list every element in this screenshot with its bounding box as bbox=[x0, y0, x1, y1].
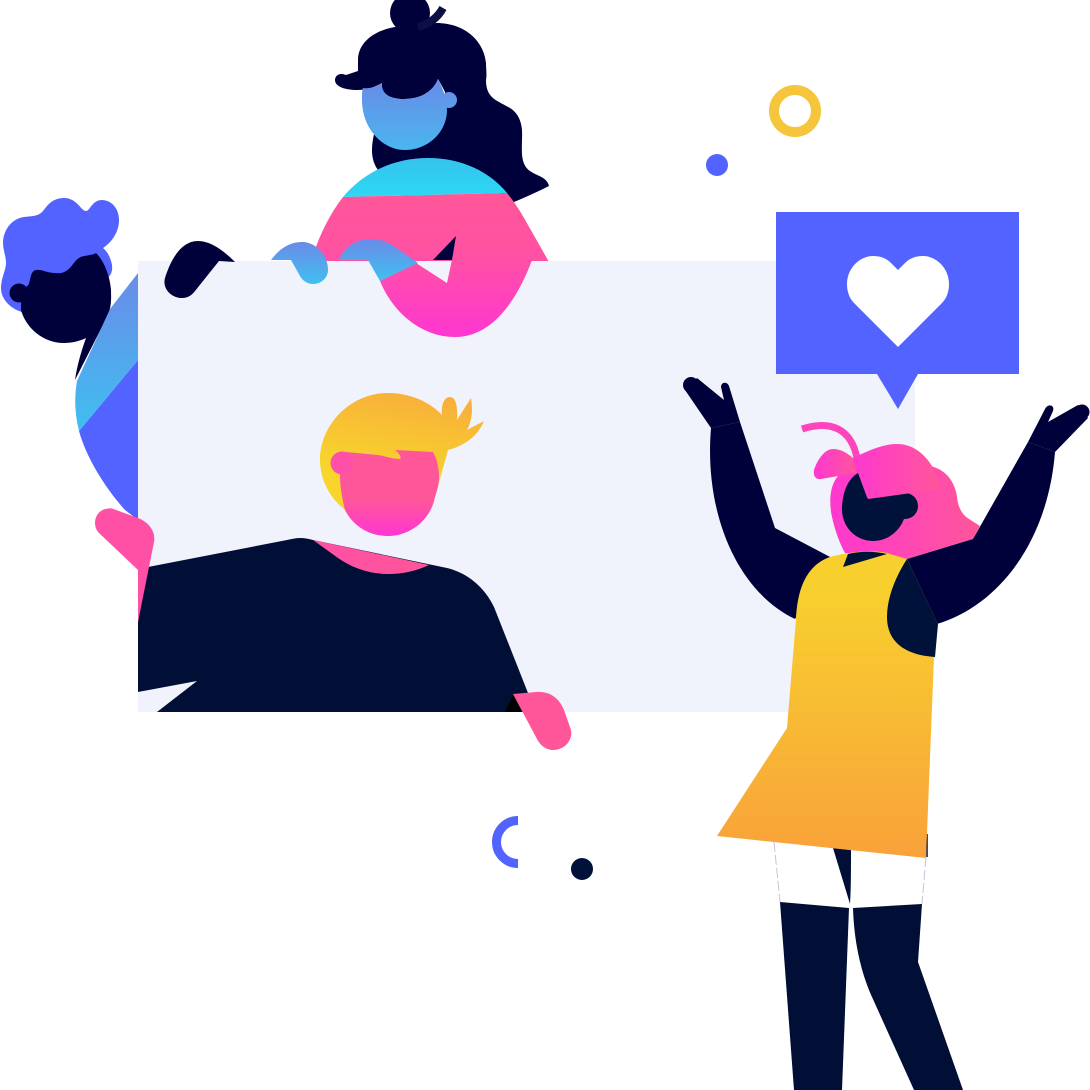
right woman: right hand bbox=[1028, 404, 1090, 452]
right woman: legs bbox=[774, 834, 963, 1090]
left man: hair bbox=[1, 198, 119, 313]
icon: heart bbox=[847, 256, 949, 347]
centre man: neck bbox=[313, 540, 429, 574]
decorative blue arc bbox=[496, 820, 518, 864]
top woman: hair tie bbox=[418, 8, 443, 27]
centre man: card corner shadow bbox=[505, 695, 522, 712]
centre man: torso bbox=[138, 538, 530, 712]
top woman: forearm bbox=[339, 239, 418, 281]
centre man: hair bbox=[320, 393, 484, 510]
right woman: face bbox=[842, 473, 918, 541]
top woman: lower shirt bbox=[380, 236, 532, 337]
centre man: face bbox=[330, 450, 439, 536]
centre man: right hand bbox=[513, 692, 571, 750]
speech bubble with heart bbox=[776, 212, 1019, 409]
left man: head bbox=[10, 253, 111, 380]
top woman: hair bbox=[335, 0, 549, 202]
decorative yellow ring bbox=[774, 90, 816, 132]
right woman: right arm bbox=[907, 442, 1055, 624]
right woman: left arm bbox=[710, 422, 832, 619]
top woman: face bbox=[362, 79, 457, 150]
right woman: arm opening bbox=[887, 559, 938, 657]
right woman: left hand bbox=[683, 377, 740, 428]
left man: torso bbox=[75, 273, 138, 520]
centre man: left hand bbox=[95, 508, 154, 622]
right woman: collar bbox=[843, 552, 887, 567]
top woman: shirt bbox=[311, 193, 549, 262]
right woman: hair bow bbox=[814, 449, 856, 479]
card panel bbox=[138, 261, 915, 712]
top woman: collar triangle bbox=[433, 236, 456, 260]
decorative dark dot bbox=[571, 858, 593, 880]
decorative blue dot bbox=[706, 154, 728, 176]
top woman: hand over card bbox=[271, 242, 328, 284]
top woman: dark hand bbox=[164, 241, 235, 298]
right woman: dress bbox=[717, 551, 938, 858]
top woman: shirt collar bbox=[343, 158, 507, 197]
right woman: hair top bbox=[853, 444, 940, 499]
right woman: hair curl bbox=[802, 426, 857, 458]
right woman: hair bbox=[802, 426, 980, 559]
